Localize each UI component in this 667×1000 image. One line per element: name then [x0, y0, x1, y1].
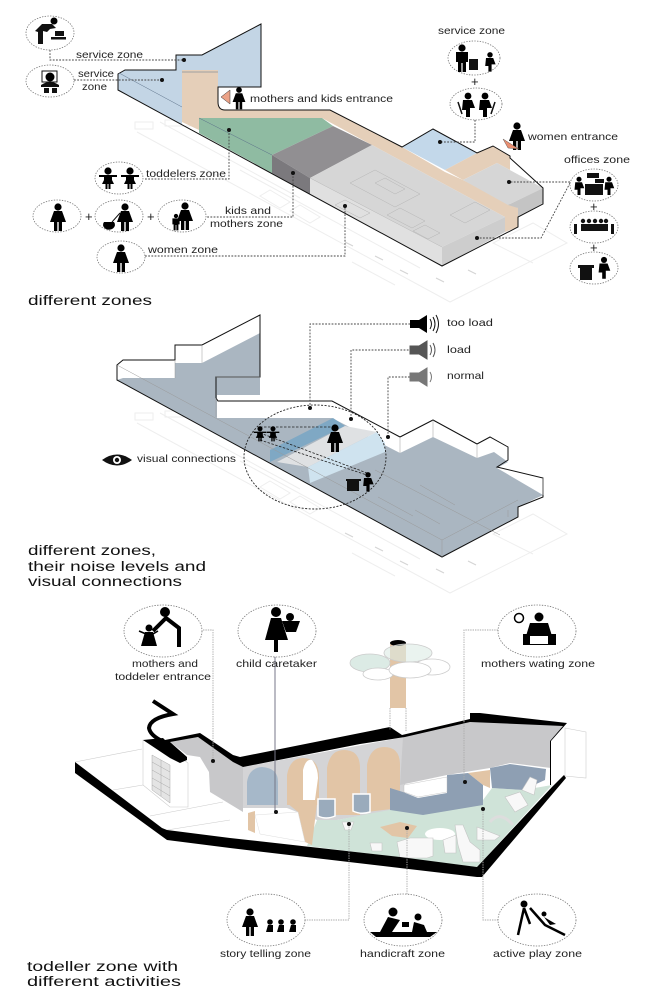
panel: different zones [26, 16, 630, 308]
label: kids and mothers zone [210, 205, 283, 230]
blue chairs [318, 794, 370, 818]
icon: speaker load [410, 341, 435, 359]
furniture lines [310, 170, 490, 247]
connector: service zone left [74, 79, 162, 81]
door [565, 728, 586, 778]
connector: kids and mothers [207, 173, 293, 217]
icon: woman [327, 424, 343, 452]
label: women zone: women zone [147, 244, 218, 256]
connector: load [351, 350, 410, 419]
label: service zone left [78, 68, 114, 93]
icon: pregnant woman [33, 200, 81, 232]
grey right wall [400, 719, 566, 785]
icon: toddlers [254, 426, 279, 441]
middle wall [243, 737, 405, 820]
blue reception cabinet [390, 773, 483, 815]
label: child caretaker: child caretaker [236, 658, 318, 670]
icon: speaker too load [410, 315, 438, 333]
heading: different zones: different zones [28, 293, 152, 308]
plus sign: + [471, 74, 479, 89]
label: mothers and toddler entrance: mothers and [132, 658, 198, 670]
icon: handicraft [364, 894, 442, 946]
label: women entrance: women entrance [527, 131, 618, 143]
grey left wall [170, 737, 243, 812]
plan outline [117, 315, 543, 557]
zone: offices wing [463, 163, 543, 205]
connector: story [305, 824, 349, 920]
anchor dots [211, 759, 485, 830]
green floor [307, 785, 552, 867]
heading: noise levels [28, 543, 206, 589]
icon: mother and toddler [124, 605, 202, 657]
connector: handicraft [406, 828, 408, 894]
connector: active play [483, 809, 498, 920]
blue arch [247, 767, 278, 805]
panel: noise levels and visual connections [28, 315, 567, 593]
white counter [404, 777, 447, 797]
label: mothers and toddler entrance [115, 658, 211, 683]
interior plan lines [119, 72, 272, 155]
connector: normal [388, 377, 410, 437]
right cabinet [490, 764, 546, 790]
zone: women and offices light grey top [310, 145, 505, 247]
white desk [255, 812, 305, 842]
label: toddlers zone: toddelers zone [146, 168, 226, 180]
play furniture [342, 777, 537, 862]
heading: toddler zone [27, 959, 181, 989]
label: too load: too load [447, 317, 493, 329]
zone: toddlers green area [199, 118, 333, 173]
zone: offices wing side [508, 188, 543, 217]
plan outline [118, 24, 543, 266]
floor slab [117, 333, 543, 557]
ground outline [75, 749, 230, 830]
icon: meeting [450, 88, 502, 120]
connector: offices lower [477, 183, 570, 238]
tan walled niche [468, 770, 490, 788]
heading: noise levels: their noise levels and [28, 559, 206, 574]
tan desk panels [248, 803, 317, 845]
connector: caretaker [274, 655, 276, 812]
dashed circle of visual connection [244, 405, 386, 509]
white tower with grid [143, 740, 188, 807]
heading: noise levels: different zones, [28, 543, 156, 558]
black curved wall [149, 701, 173, 741]
label: normal: normal [447, 370, 484, 382]
zone: offices front face [310, 178, 442, 266]
tree column [390, 640, 406, 732]
icon: women entrance [503, 122, 525, 150]
plus sign: + [147, 209, 155, 224]
icon: office meeting [570, 169, 618, 201]
label: load: load [447, 344, 471, 356]
plus sign: + [590, 240, 598, 255]
icon: boardroom [570, 211, 618, 243]
label: service zone top: service zone [76, 49, 143, 61]
connector: service right [440, 120, 475, 142]
glass wall right [308, 432, 385, 483]
zone: blue service area, right [402, 129, 477, 170]
connector: waiting [464, 630, 498, 782]
label: kids and mothers zone: mothers zone [210, 218, 283, 230]
top wall black outline [143, 713, 567, 785]
icon: mothers waiting [498, 605, 576, 657]
tree canopy discs [350, 644, 450, 680]
icon: baby [26, 65, 74, 97]
icon: speaker normal [410, 368, 432, 386]
label: story telling: story telling zone [220, 948, 311, 960]
label: visual connections: visual connections [137, 453, 236, 465]
label: mothers and kids entrance: mothers and kids entrance [250, 93, 393, 105]
black floor slab [75, 762, 566, 877]
connector: women zone [145, 206, 345, 256]
icon: child caretaker [238, 605, 316, 657]
icon: desk worker [346, 472, 374, 492]
icon: woman [97, 241, 145, 273]
icon: toddlers [95, 162, 143, 194]
zone: kids and mothers front face [272, 155, 310, 194]
light floor band [277, 426, 377, 467]
zone: circulation spine [182, 70, 518, 232]
label: service zone left: service [78, 68, 114, 80]
icon: eye [102, 454, 132, 466]
icon: mothers entrance [221, 87, 245, 109]
connector: offices [509, 181, 570, 183]
icon: desk worker [570, 252, 618, 284]
plus sign: + [85, 209, 93, 224]
label: kids and mothers zone: kids and [225, 205, 271, 217]
zone: offices side face [442, 217, 505, 266]
anchor dots [308, 406, 390, 439]
label: active play: active play zone [493, 948, 582, 960]
connector: service zone top [50, 50, 184, 60]
icon: woman with pram [95, 200, 143, 232]
plus sign: + [590, 199, 598, 214]
anchor dots [160, 58, 511, 240]
label: service zone right: service zone [438, 25, 505, 37]
label: service zone left: zone [82, 81, 107, 93]
tan arch [327, 750, 360, 815]
tan arch with opening [287, 758, 319, 805]
zone: blue service area, upper left [118, 24, 261, 125]
tan arch right [367, 747, 400, 812]
label: mothers waiting zone: mothers wating zone [481, 658, 595, 670]
zone: kids and mothers dark grey area [272, 126, 372, 178]
icon: reception [448, 41, 500, 75]
panel: toddler zone [27, 605, 595, 989]
connector: entrance [203, 630, 213, 761]
label: offices zone: offices zone [564, 154, 630, 166]
heading: noise levels: visual connections [28, 574, 182, 589]
glass wall left [270, 418, 345, 462]
connector: too load [310, 324, 410, 408]
heading: toddler zone: different activities [27, 974, 181, 989]
icon: story telling [227, 894, 305, 946]
zone: entrance corridor branch [445, 146, 510, 180]
icon: mother and child [158, 200, 206, 232]
label: mothers and toddler entrance: toddeler entrance [115, 671, 211, 683]
label: handicraft: handicraft zone [360, 948, 445, 960]
heading: toddler zone: todeller zone with [27, 959, 178, 974]
icon: baby changing [26, 16, 74, 50]
interior lines [117, 345, 543, 557]
icon: active play [498, 894, 576, 946]
connector: toddlers [144, 130, 229, 179]
sight lines [260, 427, 367, 475]
